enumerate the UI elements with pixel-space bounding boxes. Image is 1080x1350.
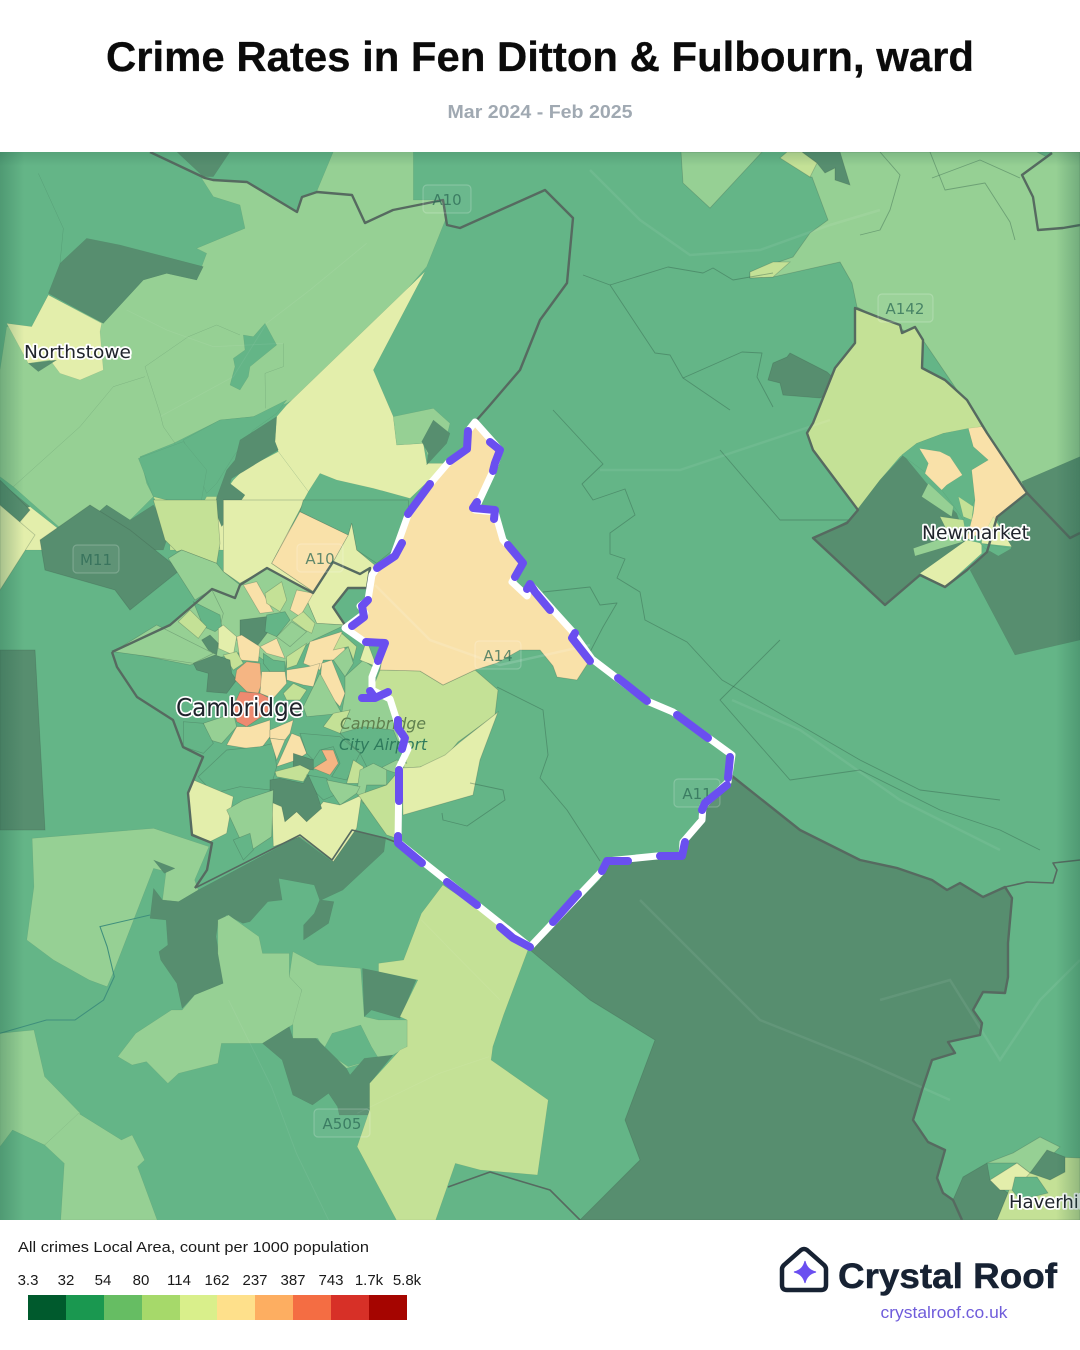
legend scale labels: 387 — [280, 1272, 306, 1289]
north-west districts — [0, 152, 450, 550]
road label A10 north — [423, 185, 471, 213]
road shields — [73, 185, 933, 1137]
legend colour ramp — [28, 1295, 407, 1320]
legend scale labels: 743 — [318, 1272, 344, 1289]
road label A11: A11 — [682, 785, 712, 803]
legend scale labels: 80 — [133, 1272, 149, 1289]
district boundaries — [112, 152, 1080, 1220]
airport label — [339, 714, 428, 754]
road label A10 Cambridge: A10 — [305, 550, 335, 568]
subtitle: date range: Mar 2024 - Feb 2025 — [448, 101, 632, 122]
legend scale labels: 32 — [58, 1272, 74, 1289]
south-east dark district — [0, 480, 1012, 1220]
road label M11: M11 — [80, 551, 112, 569]
legend scale labels: 1.7k — [355, 1272, 384, 1289]
place label: Northstowe: Northstowe — [24, 342, 131, 363]
legend scale labels — [18, 1272, 422, 1289]
legend scale labels: 3.3 — [18, 1272, 38, 1289]
road label A10 north: A10 — [432, 191, 462, 209]
road label A11 — [674, 779, 720, 807]
road label A505: A505 — [323, 1115, 361, 1133]
airport label: Cambridge — [340, 714, 426, 733]
Fen Ditton and Fulbourn neighbouring fills — [372, 670, 498, 815]
airport label: City Airport — [339, 735, 428, 754]
Cambridge city wards — [113, 500, 408, 862]
Haverhill wards — [953, 1137, 1080, 1220]
legend title: All crimes Local Area, count per 1000 population — [18, 1239, 369, 1256]
ward fill: peach zone — [345, 422, 592, 685]
road label A142: A142 — [886, 300, 924, 318]
legend — [18, 1239, 422, 1320]
place label: Newmarket: Newmarket — [922, 522, 1029, 544]
south-west districts — [0, 828, 548, 1220]
thin ward and parish lines — [442, 152, 1080, 1100]
legend scale labels: 162 — [204, 1272, 230, 1289]
place label: Cambridge: Cambridge — [176, 693, 303, 722]
road label A10 Cambridge — [297, 544, 343, 572]
road label A14 — [475, 641, 521, 669]
icon: house with star — [782, 1249, 826, 1290]
road label A14: A14 — [483, 647, 513, 665]
road label A142 — [878, 294, 933, 322]
logo: Crystal Roof — [782, 1249, 1057, 1322]
north-east districts — [681, 152, 1080, 493]
ward boundary line — [345, 422, 732, 947]
Newmarket — [807, 308, 1080, 655]
road label M11 — [73, 545, 119, 573]
legend scale labels: 54 — [95, 1272, 111, 1289]
title: Crime Rates in Fen Ditton & Fulbourn, ward — [106, 33, 974, 80]
legend scale labels: 114 — [167, 1272, 191, 1289]
legend scale labels: 5.8k — [393, 1272, 422, 1289]
legend scale labels: 237 — [242, 1272, 268, 1289]
choropleth map — [0, 152, 1080, 1220]
logo url: crystalroof.co.uk — [880, 1304, 1008, 1322]
logo wordmark: Crystal Roof — [838, 1257, 1057, 1296]
road label A505 — [314, 1109, 370, 1137]
